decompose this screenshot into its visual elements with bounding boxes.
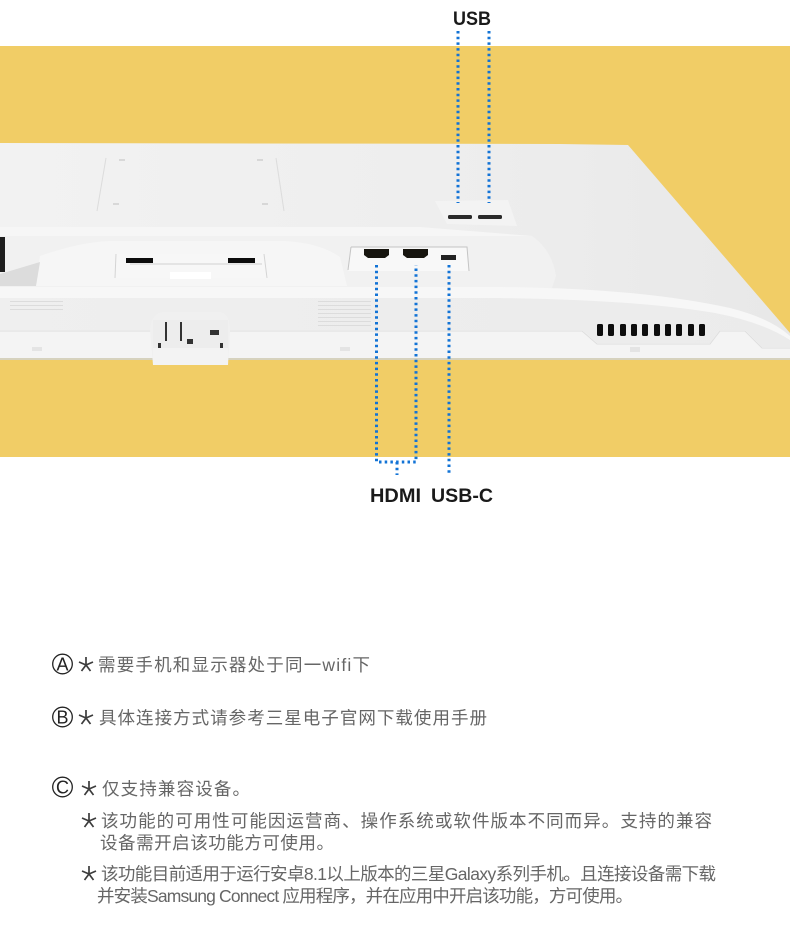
note B: B <box>56 708 69 728</box>
stand recess <box>35 241 347 286</box>
lower edge strip <box>0 287 790 360</box>
HDMI port 2 <box>403 249 428 258</box>
note C detail 1 <box>82 811 712 853</box>
note A: A <box>56 654 69 674</box>
monitor back <box>0 143 790 365</box>
label: USB-C: USB-C <box>431 485 493 507</box>
small clips <box>32 347 640 352</box>
note C detail 2: 并安装Samsung Connect 应用程序，并在应用中开启该功能，方可使用。 <box>97 886 633 906</box>
bottom shadow line <box>0 358 790 360</box>
monitor body <box>0 143 790 360</box>
note A: 需要手机和显示器处于同一wifi下 <box>98 655 370 675</box>
port panel <box>348 247 469 271</box>
USB-C port <box>441 255 456 260</box>
vent lines <box>10 301 371 326</box>
VESA mount outline <box>97 158 284 211</box>
USB dotted leaders <box>458 31 489 203</box>
stand bracket <box>115 254 267 279</box>
rear ledge <box>0 228 556 288</box>
note C detail 2: 该功能目前适用于运行安卓8.1以上版本的三星Galaxy系列手机。且连接设备需下载 <box>101 864 716 884</box>
HDMI dotted leader <box>376 265 416 475</box>
yellow background band <box>0 46 790 457</box>
note C <box>53 777 250 799</box>
note C detail 2 <box>82 864 716 906</box>
lip lines <box>0 331 790 348</box>
note C detail 1: 该功能的可用性可能因运营商、操作系统或软件版本不同而异。支持的兼容 <box>101 811 712 831</box>
note B: 具体连接方式请参考三星电子官网下载使用手册 <box>99 708 487 728</box>
rear panel strip <box>0 298 790 347</box>
note C detail 1: 设备需开启该功能方可使用。 <box>100 833 334 853</box>
bottom lip <box>0 331 790 359</box>
note C: 仅支持兼容设备。 <box>102 779 250 799</box>
USB port panel <box>435 200 517 226</box>
USB-C dotted leader <box>448 265 450 475</box>
label: HDMI: HDMI <box>370 485 421 507</box>
grey stand shadow <box>0 262 40 286</box>
black stand piece <box>0 237 5 272</box>
label: USB: USB <box>453 8 491 30</box>
note C: C <box>56 778 69 798</box>
HDMI port 1 <box>364 249 389 258</box>
vent slots <box>597 324 705 336</box>
cable clip <box>150 312 230 365</box>
